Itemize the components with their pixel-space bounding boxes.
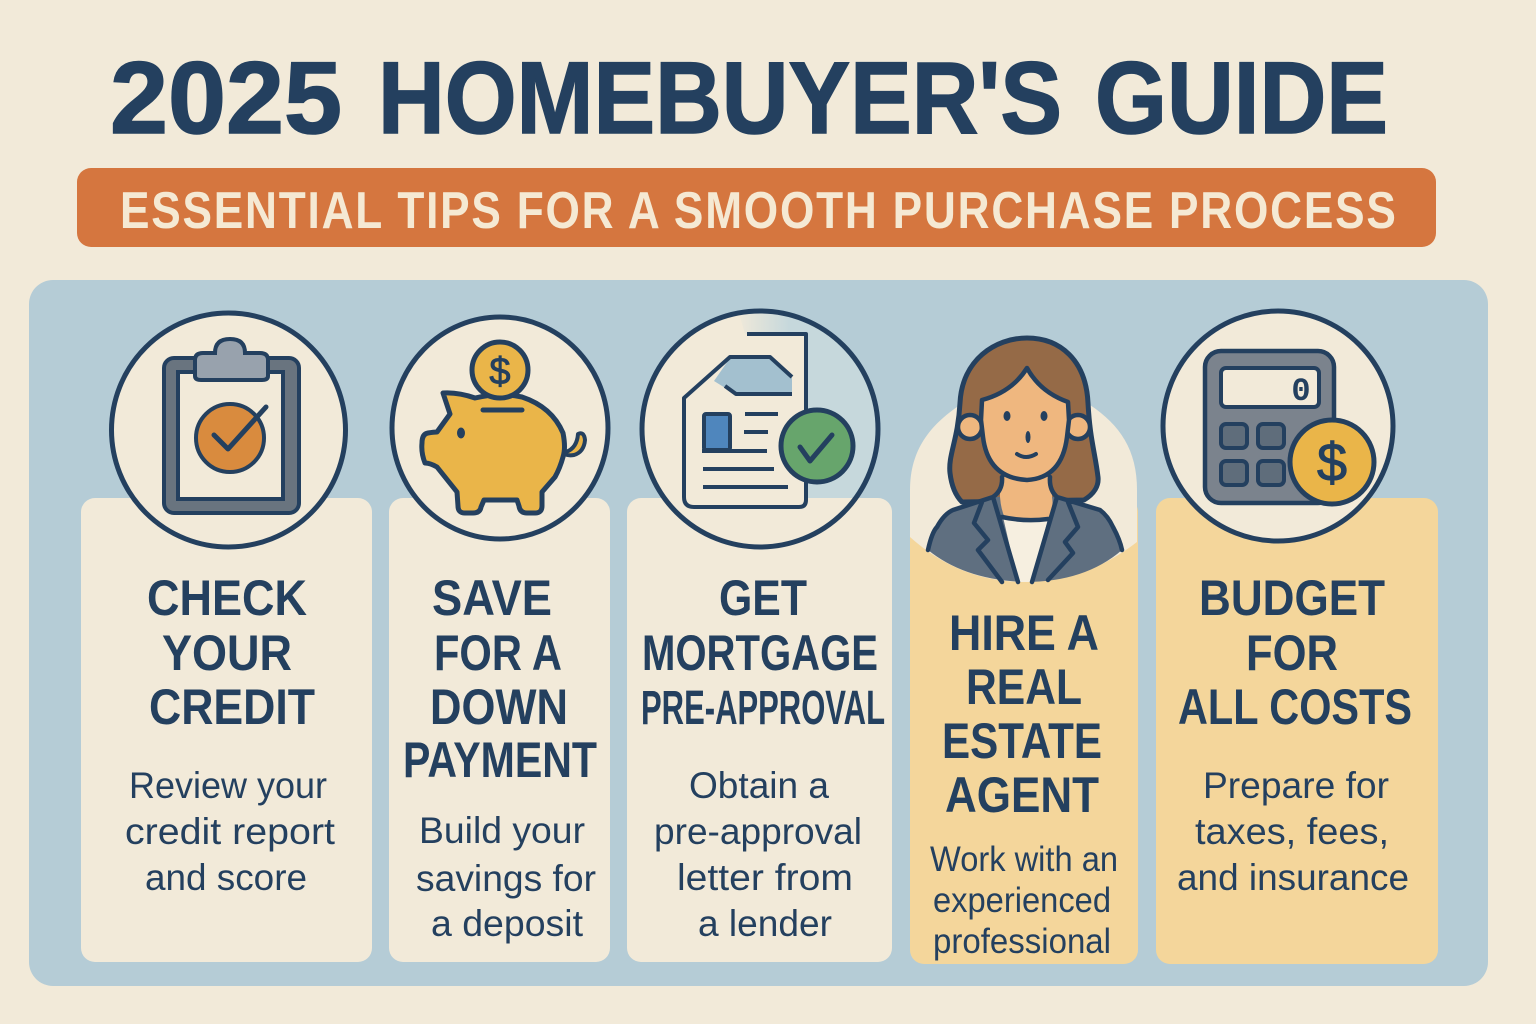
heading: AGENT	[945, 767, 1099, 823]
description: and insurance	[1177, 857, 1409, 898]
panel: hire a real estate agent	[910, 338, 1138, 964]
description: credit report	[125, 811, 336, 852]
main blue panel	[29, 280, 1488, 986]
description: Review your	[129, 765, 327, 806]
icon: clipboard	[112, 313, 346, 547]
description	[125, 765, 336, 898]
icon: mortgage document	[642, 300, 890, 547]
heading: FOR	[1246, 625, 1338, 681]
description	[416, 810, 596, 944]
description	[654, 765, 862, 944]
heading: REAL	[966, 659, 1082, 715]
description: taxes, fees,	[1195, 811, 1389, 852]
description: Prepare for	[1203, 765, 1389, 806]
description: savings for	[416, 858, 596, 899]
heading	[942, 605, 1102, 823]
description: Build your	[419, 810, 585, 851]
description	[1177, 765, 1409, 898]
icon: agent portrait	[928, 338, 1122, 582]
heading: SAVE	[432, 570, 552, 626]
heading: CREDIT	[149, 679, 315, 735]
icon: piggy bank: $	[489, 351, 511, 393]
title: 2025	[110, 41, 342, 155]
description: experienced	[933, 881, 1111, 920]
heading: MORTGAGE	[642, 625, 878, 681]
description	[930, 840, 1118, 961]
subtitle banner	[77, 168, 1436, 247]
heading: PRE-APPROVAL	[641, 682, 885, 735]
description: a deposit	[431, 903, 584, 944]
heading: ALL COSTS	[1178, 679, 1412, 735]
icon: piggy bank	[392, 317, 608, 539]
heading: GET	[719, 570, 807, 626]
heading: DOWN	[430, 679, 568, 735]
description: letter from	[677, 857, 853, 898]
title	[110, 41, 1388, 155]
title: HOMEBUYER'S	[378, 41, 1062, 155]
display digit: 0	[1291, 373, 1311, 410]
heading	[403, 570, 597, 788]
heading: CHECK	[147, 570, 307, 626]
icon: calculator: $	[1317, 433, 1347, 493]
heading: ESTATE	[942, 713, 1102, 769]
title: GUIDE	[1095, 41, 1388, 155]
heading: HIRE A	[949, 605, 1099, 661]
heading	[147, 570, 315, 735]
heading	[641, 570, 885, 735]
heading	[1178, 570, 1412, 735]
heading: YOUR	[162, 625, 292, 681]
heading: FOR A	[434, 625, 562, 681]
description: professional	[933, 922, 1111, 961]
panel: mortgage pre-approval	[627, 300, 892, 962]
description: Work with an	[930, 840, 1118, 879]
description: and score	[145, 857, 307, 898]
subtitle banner: ESSENTIAL TIPS FOR A SMOOTH PURCHASE PROCESS	[120, 182, 1396, 240]
heading: BUDGET	[1199, 570, 1385, 626]
description: Obtain a	[689, 765, 829, 806]
icon: calculator	[1163, 311, 1393, 541]
panel: check your credit	[81, 313, 372, 962]
panel: save for a down payment	[389, 317, 610, 962]
panel: budget for all costs	[1156, 311, 1438, 964]
description: a lender	[698, 903, 832, 944]
heading: PAYMENT	[403, 732, 597, 788]
description: pre-approval	[654, 811, 862, 852]
